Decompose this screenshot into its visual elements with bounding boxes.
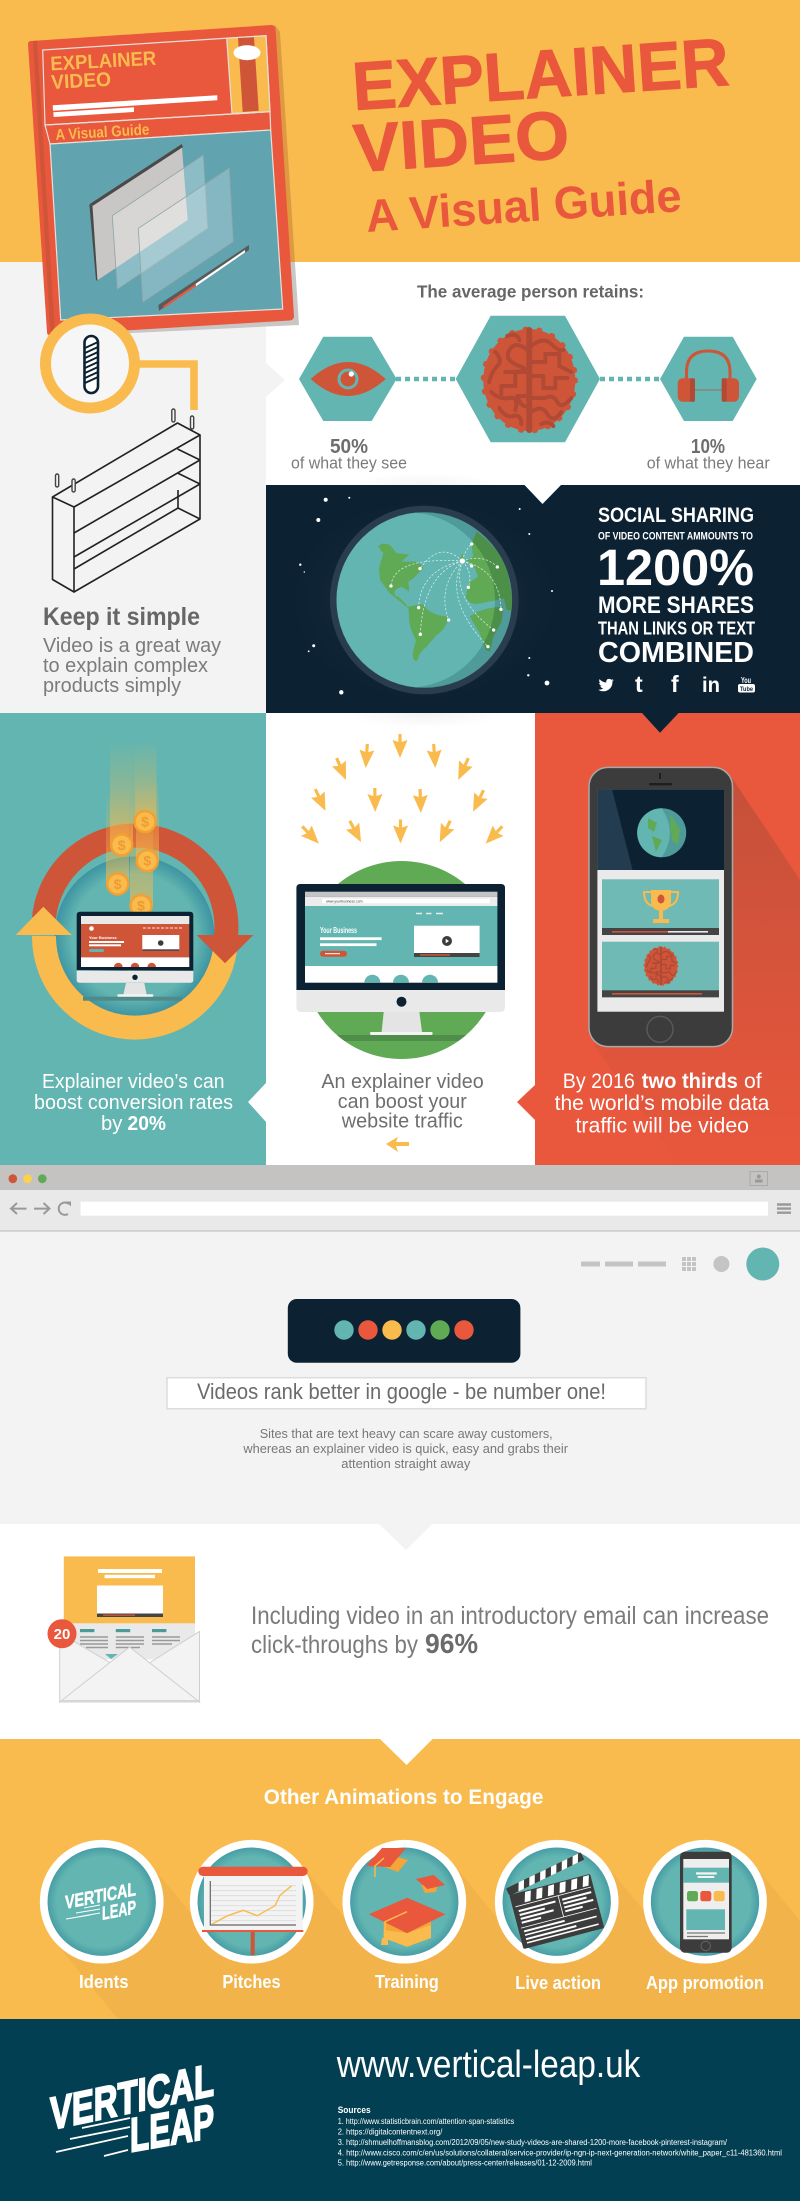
icons: social networks: Tube — [740, 686, 753, 693]
labels: animation types: Idents — [79, 1972, 129, 1992]
stat: 10 percent — [647, 436, 770, 472]
icons: social networks: You — [741, 676, 751, 685]
stat: 10 percent: of what they hear — [647, 454, 770, 472]
icons: social networks: f — [671, 671, 679, 697]
text: social sharing stat — [597, 504, 755, 669]
icon: idents: VERTICAL — [65, 1879, 136, 1914]
text: sources: 3. http://shmuelhoffmansblog.com/2012/09/05/new-study-videos-are-shared-1200-more-facebook-pinterest-instagram/ — [338, 2138, 728, 2147]
panel: social sharing — [266, 485, 800, 714]
text: sources: 5. http://www.getresponse.com/about/press-center/releases/01-12-2009.html — [338, 2159, 592, 2168]
video tile: trophy — [602, 879, 719, 935]
panel: footer — [0, 2019, 800, 2201]
connector: dotted lines — [396, 377, 660, 381]
panel: header — [0, 0, 800, 262]
text: keep it simple body: to explain complex — [43, 655, 208, 677]
text: email click-throughs: 96% — [425, 1628, 478, 1659]
icon: small monitor: Your Business — [89, 935, 117, 940]
icon: big monitor on green circle — [296, 861, 505, 1059]
text: sources — [338, 2105, 782, 2168]
text: mobile data: the world’s mobile data — [555, 1092, 770, 1115]
labels: animation types: App promotion — [646, 1973, 764, 1993]
icon: earth — [319, 506, 519, 694]
labels: animation types: Pitches — [222, 1972, 281, 1992]
text: sources: 4. http://www.cisco.com/c/en/us/solutions/collateral/service-provider/ip-ngn-ip-next-generation-network/white_paper_c11-481360.html — [338, 2148, 782, 2157]
icon: small monitor — [77, 912, 193, 1001]
text: conversion rates: 20% — [128, 1113, 166, 1135]
video tile: brain — [602, 942, 719, 997]
icon: wireframe shelf — [52, 409, 200, 592]
text: website traffic: can boost your — [338, 1091, 467, 1113]
text: mobile data: two thirds — [642, 1070, 738, 1093]
text: mobile data: of — [744, 1070, 762, 1093]
book title text: A Visual Guide — [55, 121, 150, 144]
icons: social networks: in — [702, 674, 720, 697]
logo: vertical leap: LEAP — [130, 2095, 214, 2163]
badge: 20 — [54, 1626, 70, 1643]
search logo box — [288, 1299, 520, 1363]
text: text heavy sites: Sites that are text heavy can scare away customers, — [260, 1426, 553, 1441]
labels: animation types — [79, 1972, 764, 1993]
phone earth — [637, 808, 686, 857]
browser title bar — [0, 1165, 800, 1190]
icon: big monitor on green circle: www.yourbusiness.com — [326, 900, 363, 904]
panel: website traffic — [248, 700, 535, 1165]
browser toolbar — [0, 1190, 800, 1232]
text: conversion rates: Explainer video’s can — [42, 1071, 224, 1093]
text: social sharing stat: COMBINED — [598, 637, 754, 669]
icons: social networks: t — [635, 671, 643, 697]
heading: other animations: Other Animations to Engage — [264, 1785, 543, 1809]
panel: mobile data — [517, 713, 800, 1165]
heading: keep it simple: Keep it simple — [43, 603, 200, 631]
stat: 50 percent: 50% — [330, 436, 368, 458]
text: keep it simple body — [43, 635, 221, 697]
icon: training — [346, 1844, 462, 1960]
text: conversion rates: boost conversion rates — [34, 1092, 233, 1114]
text: conversion rates — [34, 1071, 233, 1135]
text: keep it simple body: Video is a great way — [43, 635, 221, 657]
labels: animation types: Training — [375, 1972, 439, 1992]
text: email click-throughs — [251, 1602, 769, 1659]
text: sources: 2. https://digitalcontentnext.org/ — [338, 2127, 443, 2136]
stat: 10 percent: 10% — [691, 436, 725, 458]
heading: retains: The average person retains: — [417, 282, 644, 302]
text: keep it simple body: products simply — [43, 675, 181, 697]
icon: traffic arrows — [297, 734, 508, 849]
icon: magnifier on screw — [46, 319, 194, 410]
icon: idents — [44, 1844, 160, 1960]
icon: pitches — [194, 1844, 310, 1960]
icon: conversion cycle — [16, 836, 253, 1028]
panel: email — [0, 1524, 800, 1739]
book cover illustration — [28, 25, 299, 337]
icon: falling coins: $ — [141, 814, 149, 830]
badge — [48, 1619, 76, 1648]
text: sources: 1. http://www.statisticbrain.com/attention-span-statistics — [338, 2117, 514, 2126]
text: website traffic: An explainer video — [321, 1071, 484, 1093]
logo: vertical leap — [50, 2054, 214, 2163]
text: mobile data — [555, 1070, 770, 1138]
book artwork panel — [50, 130, 283, 320]
search field: Videos rank better in google - be number one! — [197, 1379, 606, 1404]
text: social sharing stat: OF VIDEO CONTENT AMMOUNTS TO — [598, 530, 753, 542]
icon: envelope with letter — [48, 1556, 200, 1702]
circle long shadows — [54, 1863, 800, 2019]
text: social sharing stat: THAN LINKS OR TEXT — [598, 618, 755, 638]
logo: vertical leap: VERTICAL — [50, 2054, 214, 2140]
panel: average person retains — [266, 262, 800, 501]
text: sources: Sources — [338, 2105, 371, 2116]
title: Explainer: EXPLAINER — [350, 24, 731, 125]
book title text: EXPLAINER — [50, 48, 157, 75]
icon: falling coins — [106, 740, 159, 916]
text: website traffic: website traffic — [341, 1111, 463, 1133]
text: mobile data: By 2016 — [563, 1070, 635, 1093]
icon: falling coins: $ — [137, 898, 145, 914]
icon: big monitor on green circle: Your Business — [320, 925, 357, 935]
panel: keep it simple — [0, 262, 266, 713]
text: website traffic — [321, 1071, 484, 1133]
text: social sharing stat: SOCIAL SHARING — [598, 504, 754, 527]
panel: other animations — [0, 1739, 800, 2019]
title: Video: VIDEO — [351, 97, 572, 187]
labels: animation types: Live action — [515, 1973, 601, 1993]
text: email click-throughs: click-throughs by — [251, 1631, 418, 1659]
icon: live action clapperboard — [499, 1844, 615, 1960]
stat: 50 percent — [291, 436, 407, 472]
icon: falling coins: $ — [118, 837, 126, 853]
icons: social networks — [598, 671, 755, 697]
nav icons — [581, 1248, 779, 1280]
icon: idents: LEAP — [102, 1898, 136, 1925]
text: website url: www.vertical-leap.uk — [336, 2044, 641, 2086]
text: social sharing stat: MORE SHARES — [598, 592, 754, 619]
text: social sharing stat: 1200% — [597, 539, 754, 596]
text: mobile data: traffic will be video — [576, 1115, 749, 1138]
icon: brain hexagon — [456, 316, 600, 442]
icon: app promotion phone — [647, 1844, 763, 1960]
icon: falling coins: $ — [143, 853, 151, 869]
book title text: VIDEO — [51, 69, 112, 94]
subtitle: A Visual Guide — [364, 169, 683, 242]
book title text — [50, 48, 157, 144]
text: text heavy sites — [242, 1426, 569, 1471]
text: text heavy sites: whereas an explainer video is quick, easy and grabs their — [242, 1441, 569, 1456]
panel: browser search — [0, 1165, 800, 1524]
text: text heavy sites: attention straight away — [341, 1456, 471, 1471]
panel: conversion rates — [0, 713, 266, 1165]
icon: phone — [589, 767, 732, 1047]
icon: eye hexagon — [299, 337, 397, 421]
stat: 50 percent: of what they see — [291, 454, 407, 472]
stars — [299, 497, 553, 694]
icon: headphones hexagon — [660, 337, 757, 421]
text: conversion rates: by — [101, 1113, 122, 1135]
arrow: pointing left — [386, 1137, 409, 1152]
icon: falling coins: $ — [114, 876, 122, 892]
